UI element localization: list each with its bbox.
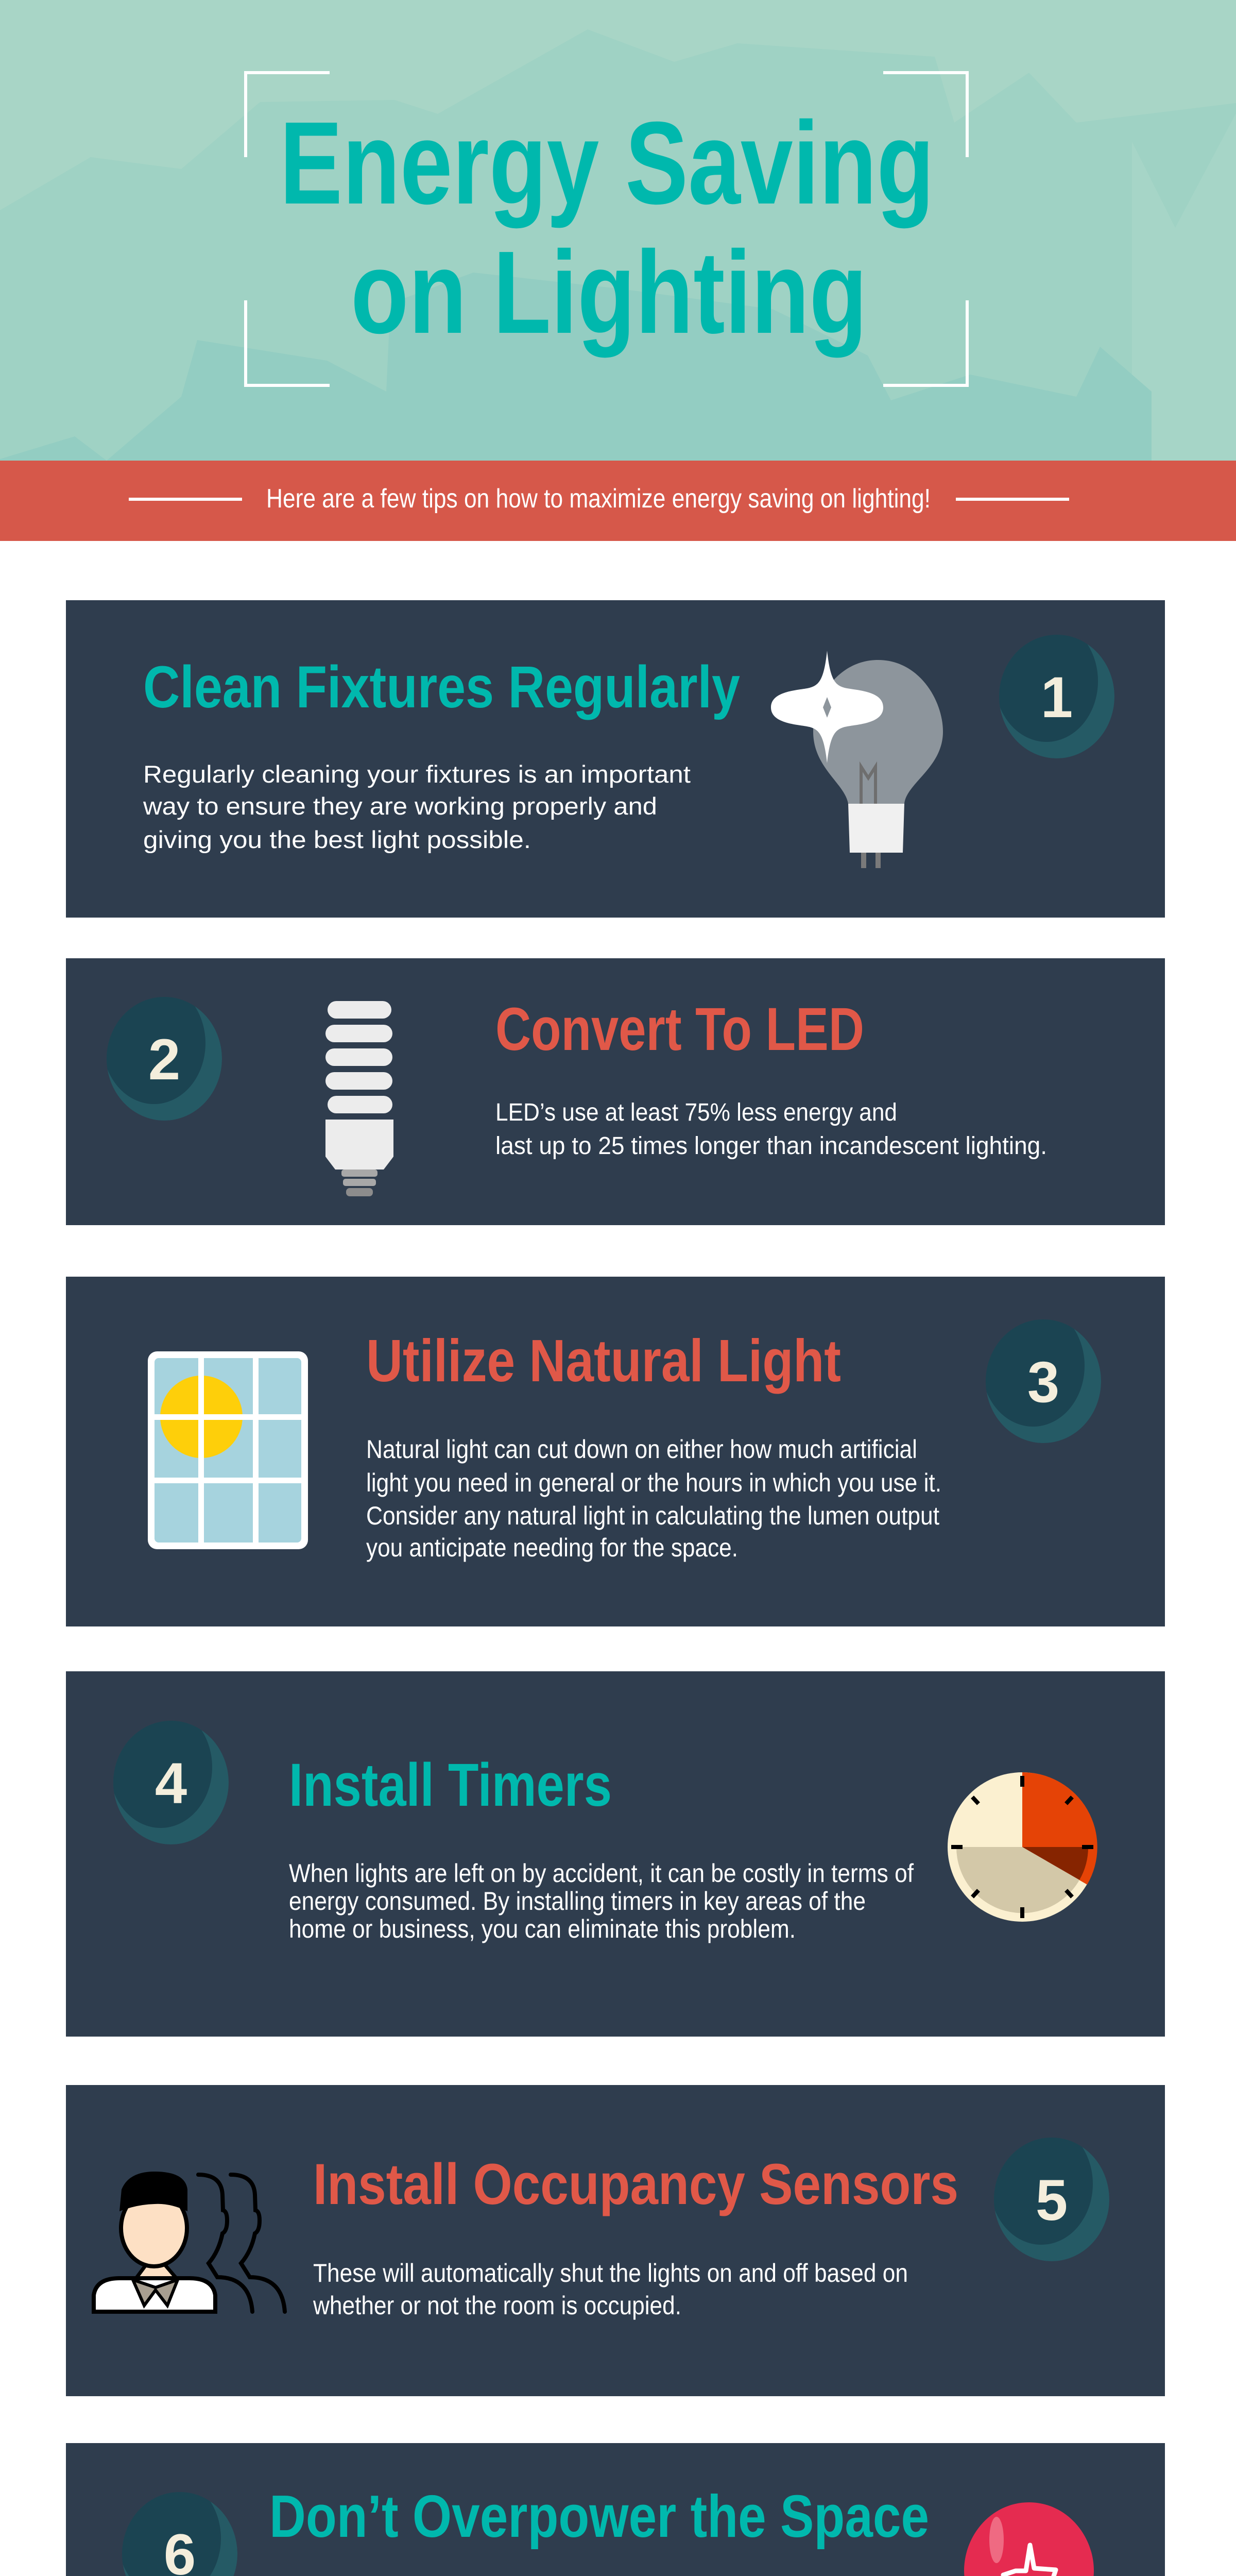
title [280,98,934,358]
icon: people [94,2172,285,2312]
number badge 4: 4 [155,1751,187,1816]
panel 5: occupancy sensors [66,2085,1165,2396]
panel 4: timers [66,1671,1165,2037]
body 1 [143,760,691,853]
heading 6: Don’t Overpower the Space [269,2483,929,2550]
icon: CFL bulb [325,1001,393,1196]
heading 5: Install Occupancy Sensors [313,2152,958,2216]
icon: red bulb [964,2502,1094,2576]
heading 4: Install Timers [289,1751,612,1819]
number badge 6 [122,2492,237,2576]
number badge 2: 2 [148,1027,180,1092]
panel 3: natural light [66,1277,1165,1626]
title: Energy Saving [280,98,934,229]
header background [0,0,1236,461]
number badge 5 [994,2138,1109,2261]
icon: clock [948,1772,1097,1922]
icon: bulb with sparkle [771,651,943,868]
body 2: LED’s use at least 75% less energy and [495,1099,897,1126]
title frame [246,73,967,385]
body 5 [313,2259,908,2320]
heading 2: Convert To LED [495,995,864,1063]
body 5: whether or not the room is occupied. [313,2291,681,2320]
body 2 [495,1099,1047,1160]
body 4: energy consumed. By installing timers in key areas of the [289,1887,866,1916]
body 3 [366,1435,941,1562]
body 1: Regularly cleaning your fixtures is an important [143,760,691,788]
body 1: giving you the best light possible. [143,826,531,853]
body 4: When lights are left on by accident, it can be costly in terms of [289,1859,914,1888]
body 2: last up to 25 times longer than incandescent lighting. [495,1132,1047,1160]
panel 6: don't overpower [66,2443,1165,2576]
panel 1: clean fixtures [66,600,1165,918]
body 4: home or business, you can eliminate this problem. [289,1914,796,1943]
body 5: These will automatically shut the lights on and off based on [313,2259,908,2287]
heading 3: Utilize Natural Light [366,1327,841,1394]
number badge 1 [999,635,1114,758]
panel 2: convert to LED [66,958,1165,1225]
subtitle banner: Here are a few tips on how to maximize energy saving on lighting! [266,484,931,514]
number badge 5: 5 [1036,2168,1068,2232]
number badge 3: 3 [1027,1350,1059,1414]
body 3: Natural light can cut down on either how much artificial [366,1435,917,1464]
icon: window with sun [148,1351,308,1549]
body 3: light you need in general or the hours in which you use it. [366,1468,941,1497]
title: on Lighting [351,227,867,358]
number badge 1: 1 [1041,665,1073,730]
number badge 4 [113,1721,229,1844]
body 1: way to ensure they are working properly and [143,792,657,820]
heading 1: Clean Fixtures Regularly [143,654,740,720]
body 3: Consider any natural light in calculating the lumen output [366,1501,939,1530]
number badge 2 [107,997,222,1121]
number badge 3 [986,1319,1101,1443]
body 3: you anticipate needing for the space. [366,1533,738,1562]
subtitle banner [0,461,1236,541]
body 4 [289,1859,914,1943]
